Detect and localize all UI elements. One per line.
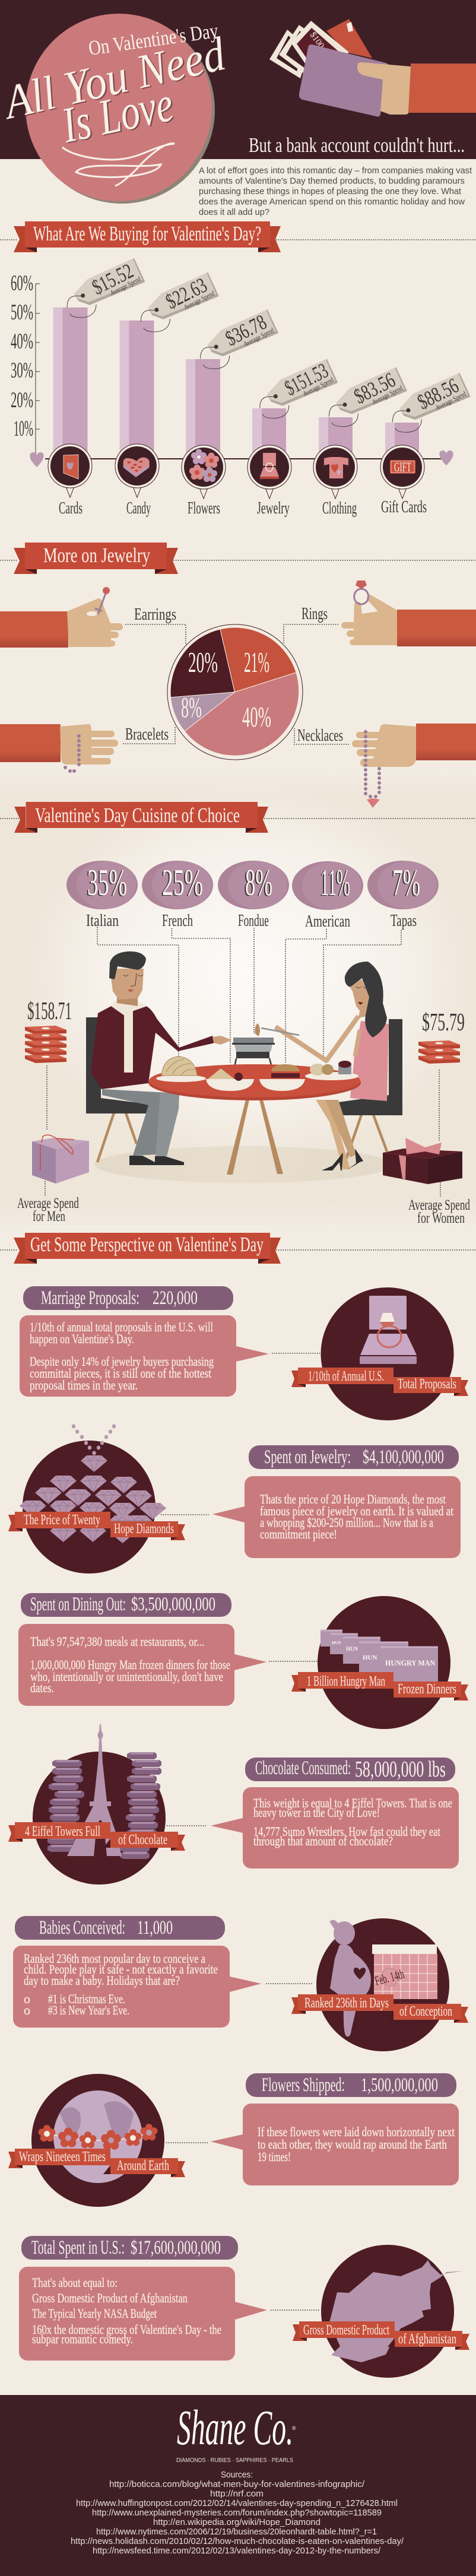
- calendar: Feb. 14th: [373, 1966, 406, 1988]
- heading banner: cuisine of choice: [14, 802, 268, 833]
- ribbon caption: Around Earth: [117, 2158, 169, 2174]
- slice: necklaces 40%: [185, 672, 299, 756]
- dress: [350, 1021, 389, 1101]
- cuisine bubble: tapas 7%: 7%: [392, 861, 420, 903]
- y axis: 10%: [14, 417, 33, 441]
- arm with fondue fork: [255, 1016, 360, 1061]
- bar: candy: [120, 321, 154, 459]
- cuisine bubble: italian 35%: [66, 861, 138, 909]
- slice: earrings 20%: [170, 629, 234, 697]
- stat pill: 220,000: [153, 1287, 198, 1309]
- stat pill: $3,500,000,000: [131, 1594, 215, 1615]
- panel: total spent in us: [19, 2236, 469, 2378]
- price tag: clothing: $83.56: [350, 368, 399, 408]
- chocolate stack right: [120, 1752, 161, 1859]
- cuisine bubble: french 25%: 25%: [162, 861, 203, 903]
- caption: Average Spend: [17, 1195, 79, 1211]
- gift box purple: [32, 1135, 89, 1184]
- ribbon caption: [8, 2149, 185, 2177]
- sources list: Sources:: [221, 2470, 253, 2480]
- dining table with food and fondue pot: [148, 1038, 361, 1100]
- price tag: candy: Average Spend: [182, 289, 216, 312]
- illustration: frozen dinners in oval: HUN: [346, 1646, 358, 1652]
- men's average spend: [17, 998, 89, 1224]
- cuisine bubble: fondue 8%: [218, 861, 289, 909]
- stat pill: Flowers Shipped:: [262, 2074, 345, 2096]
- stat pill: Spent on Dining Out:: [30, 1594, 126, 1615]
- fondue pot: [232, 1038, 275, 1077]
- logo: shane co: DIAMONDS · RUBIES · SAPPHIRES · PEARLS: [176, 2457, 293, 2464]
- stat pill: [23, 1286, 233, 1310]
- illustration: hand holding wallet with cash and card: [269, 19, 476, 116]
- price tag: clothing: Average Spend: [370, 383, 404, 406]
- ribbon caption: [291, 1994, 468, 2023]
- connector lines: cuisines to dishes: [97, 927, 401, 1062]
- title: is love: Is Love: [57, 76, 178, 154]
- panel: marriage proposals: [20, 1286, 468, 1420]
- connector lines: jewelry labels: [123, 624, 349, 744]
- text callout: o: [24, 2003, 30, 2017]
- icon medallion: gift cards: GIFT: [394, 459, 411, 474]
- text callout: 160x the domestic gross of Valentine's Day - the: [32, 2322, 221, 2337]
- price tag: jewelry: Average Spend: [302, 375, 335, 398]
- category labels: [59, 498, 427, 518]
- dish: sandwich and berries: [206, 1068, 254, 1091]
- value: $158.71: [27, 998, 72, 1025]
- cuisine labels: Tapas: [391, 912, 417, 930]
- stat pill: [249, 1445, 459, 1469]
- pie values: [181, 646, 271, 733]
- stat pill: [21, 2236, 238, 2260]
- price tag: cards: [67, 258, 145, 318]
- cuisine bubble: american 11%: 11%: [320, 861, 350, 903]
- caption: for Men: [33, 1208, 65, 1224]
- category labels: Flowers: [188, 499, 220, 518]
- text callout: #3 is New Year's Eve.: [48, 2003, 129, 2017]
- cuisine bubble: fondue 8%: 8%: [245, 861, 272, 903]
- text callout: who, intentionally or unintentionally, don't have: [30, 1669, 223, 1684]
- illustration: frozen dinners in oval: HUN: [363, 1654, 377, 1661]
- illustration: hope diamonds in oval: [20, 1425, 166, 1573]
- text callout: That's about equal to:: [32, 2275, 118, 2290]
- table top: [148, 1065, 361, 1100]
- header band: [0, 0, 476, 159]
- intro paragraph: purchasing these things in hopes of pleasing the one they love. What: [199, 187, 461, 196]
- intro paragraph: does it all add up?: [199, 208, 269, 217]
- stat pill: Spent on Jewelry:: [264, 1446, 351, 1468]
- ribbon caption: Hope Diamonds: [114, 1521, 174, 1537]
- ribbon caption: of Chocolate: [118, 1832, 167, 1848]
- text callout: [211, 1787, 459, 1868]
- icon medallion: jewelry: [247, 445, 291, 499]
- text callout: dates.: [30, 1680, 54, 1695]
- category labels: Jewelry: [257, 499, 290, 518]
- text callout: subpar romantic comedy.: [32, 2331, 133, 2346]
- hand holding ring: [341, 580, 476, 646]
- y axis: 50%: [11, 300, 33, 325]
- credit card: [326, 19, 372, 58]
- y axis: 20%: [11, 388, 33, 413]
- ribbon caption: [8, 1512, 185, 1540]
- bar: cards: [53, 307, 88, 459]
- calendar: [372, 1944, 437, 1999]
- text callout: heavy tower in the City of Love!: [253, 1805, 380, 1820]
- caption: [17, 1195, 79, 1224]
- label: bracelets: Bracelets: [125, 725, 169, 744]
- text callout: Despite only 14% of jewelry buyers purchasing: [30, 1354, 214, 1369]
- women's average spend: [383, 1009, 470, 1226]
- gift box dark: [383, 1138, 462, 1184]
- title: all you need: All You Need: [0, 28, 230, 130]
- text callout: [20, 1315, 269, 1397]
- illustration: ring box in oval: [320, 1287, 453, 1420]
- intro paragraph: amounts of Valentine's Day themed products, to budding paramours: [199, 177, 465, 186]
- illustration: expecting mother and calendar: [316, 1918, 449, 2051]
- price tag: jewelry: [260, 359, 338, 418]
- bar: clothing: [319, 417, 353, 459]
- dish: pasta: [156, 1057, 206, 1082]
- floor shadow under table: [94, 1146, 392, 1183]
- man on chair: [86, 951, 232, 1165]
- text callout: 1,000,000,000 Hungry Man frozen dinners for those: [30, 1657, 230, 1672]
- stat pill: 1,500,000,000: [361, 2074, 438, 2096]
- sources list: http://news.holidash.com/2010/02/12/how-much-chocolate-is-eaten-on-valentines-day/: [71, 2536, 404, 2546]
- price tag: flowers: $36.78: [221, 310, 270, 350]
- ribbon caption: Wraps Nineteen Times: [19, 2149, 106, 2165]
- cuisine labels: American: [305, 912, 350, 931]
- title: on valentine's day: On Valentine's Day: [87, 19, 220, 60]
- cuisine labels: Fondue: [238, 912, 269, 930]
- intro paragraph: does the average American spend on this romantic holiday and how: [199, 197, 465, 207]
- wallet: [299, 45, 389, 116]
- woman on chair: [255, 962, 402, 1170]
- panel: spent on jewelry: [8, 1425, 461, 1573]
- icon medallion: cards: [48, 444, 92, 497]
- stat pill: [246, 2073, 456, 2097]
- price tag: gift cards: $88.56: [414, 373, 462, 414]
- text callout: [212, 1476, 461, 1558]
- textured backdrop: cuisine section: [0, 772, 476, 1229]
- illustration: eiffel tower and chocolate stacks: [33, 1724, 166, 1885]
- icon medallion: clothing: [313, 445, 357, 499]
- sources list: http://newsfeed.time.com/2012/02/13/valentines-day-2012-by-the-numbers/: [93, 2546, 381, 2556]
- ribbon caption: Ranked 236th in Days: [304, 1996, 389, 2011]
- text callout: The Typical Yearly NASA Budget: [32, 2306, 157, 2321]
- ribbon caption: 1 Billion Hungry Man: [307, 1674, 385, 1689]
- text callout: child. People play it safe - not exactly a favorite: [24, 1962, 218, 1977]
- cuisine bubble: american 11%: [292, 861, 363, 910]
- stat pill: Babies Conceived:: [39, 1917, 125, 1939]
- panel: flowers shipped: [8, 2073, 459, 2207]
- stat pill: 11,000: [137, 1917, 173, 1939]
- face: [110, 969, 144, 1006]
- text callout: through that amount of chocolate?: [253, 1833, 393, 1848]
- ribbon caption: [8, 1822, 185, 1851]
- text callout: happen on Valentine's Day.: [30, 1331, 134, 1346]
- face: [350, 979, 369, 1018]
- cash stack: [418, 1040, 460, 1064]
- cuisine bubble: french 25%: [142, 861, 213, 909]
- y axis: 60%: [11, 271, 33, 296]
- dish: dumplings and dessert: [305, 1061, 358, 1080]
- illustration: frozen dinners in oval: HUN: [332, 1641, 341, 1645]
- heading banner: more on jewelry: [14, 543, 178, 574]
- pie values: 21%: [244, 646, 269, 678]
- hand: [212, 1036, 232, 1045]
- pie values: 40%: [242, 700, 271, 733]
- bar: gift cards: [385, 423, 419, 459]
- stat pill: Total Spent in U.S.:: [31, 2237, 125, 2258]
- sources list: http://en.wikipedia.org/wiki/Hope_Diamond: [153, 2517, 320, 2527]
- arm sleeve: [408, 64, 476, 113]
- hand holding earring: [0, 587, 123, 648]
- price tag: jewelry: $151.53: [281, 359, 332, 400]
- category labels: Cards: [59, 499, 82, 518]
- stat pill: Chocolate Consumed:: [255, 1757, 351, 1779]
- ribbon caption: [293, 2321, 469, 2350]
- label: rings: Rings: [302, 605, 328, 623]
- sources list: http://www.unexplained-mysteries.com/forum/index.php?showtopic=118589: [92, 2508, 382, 2518]
- heading banner: what are we buying: What Are We Buying for Valentine's Day?: [33, 222, 261, 245]
- price tag: candy: $22.63: [162, 273, 211, 313]
- collar and scarf: [111, 999, 147, 1073]
- text callout: [19, 2267, 267, 2361]
- price tag: cards: Average Spend: [109, 275, 142, 297]
- title flourish: [62, 144, 174, 186]
- bar: jewelry: [252, 408, 286, 459]
- text callout: proposal times in the year.: [30, 1378, 138, 1392]
- hand with bracelet: [0, 724, 118, 773]
- ribbon caption: 4 Eiffel Towers Full: [25, 1824, 100, 1839]
- panel: chocolate consumed: [8, 1724, 459, 1885]
- logo: shane co: Shane Co.: [177, 2400, 293, 2456]
- eiffel tower: [67, 1724, 122, 1856]
- ribbon caption: Gross Domestic Product: [303, 2323, 389, 2338]
- intro paragraph: [199, 166, 472, 217]
- illustration: map of afghanistan: [321, 2245, 463, 2378]
- hair: [109, 951, 146, 979]
- text callout: 1/10th of annual total proposals in the U.S. will: [30, 1319, 213, 1334]
- bank notes: [269, 21, 349, 78]
- stat pill: $17,600,000,000: [131, 2237, 221, 2258]
- y axis: 40%: [11, 329, 33, 354]
- legs and heels: [316, 1100, 363, 1170]
- cuisine bubble: italian 35%: 35%: [87, 861, 127, 903]
- text callout: Gross Domestic Product of Afghanistan: [32, 2291, 188, 2305]
- pie values: 20%: [188, 646, 218, 678]
- text callout: committal pieces, it is still one of the hottest: [30, 1366, 211, 1381]
- logo: shane co: ®: [292, 2425, 296, 2431]
- bar chart: share buying each gift: [11, 271, 453, 467]
- heading banner: get some perspective: Get Some Perspective on Valentine's Day: [30, 1233, 264, 1256]
- ribbon caption: [291, 1672, 468, 1701]
- hair: [345, 962, 387, 1038]
- ribbon caption: 1/10th of Annual U.S.: [308, 1369, 384, 1384]
- icon medallion: flowers: [182, 445, 226, 499]
- intro paragraph: A lot of effort goes into this romantic day – from companies making vast: [199, 166, 472, 176]
- slice: rings 21%: [220, 627, 296, 692]
- price tag: flowers: [201, 309, 278, 369]
- table legs: [227, 1100, 283, 1175]
- bank notes: $100: [308, 30, 326, 50]
- text callout: day to make a baby. Holidays that are?: [24, 1973, 180, 1988]
- text callout: #1 is Christmas Eve.: [48, 1991, 125, 2006]
- icon medallion: gift cards: [380, 445, 424, 499]
- category labels: Gift Cards: [381, 498, 427, 516]
- heading banner: what are we buying: [14, 221, 281, 252]
- text callout: [211, 2104, 459, 2185]
- sources list: http://www.nytimes.com/2006/12/19/business/20leonhardt-table.html?_r=1: [96, 2527, 377, 2537]
- illustration: globe wrapped with flowers: [31, 2074, 164, 2207]
- text callout: That's 97,547,380 meals at restaurants, or...: [30, 1634, 204, 1649]
- cuisine labels: French: [162, 912, 193, 930]
- pie chart: jewelry share: [167, 624, 303, 760]
- text callout: o: [24, 1991, 30, 2006]
- cuisine labels: [86, 912, 417, 931]
- price tag: clothing: [329, 367, 407, 427]
- footer band: [0, 2395, 476, 2576]
- stat pill: Marriage Proposals:: [41, 1287, 139, 1309]
- sources list: [71, 2470, 404, 2556]
- caption: [408, 1197, 470, 1226]
- logo: shane co: [176, 2400, 296, 2464]
- stat pill: [15, 1916, 225, 1940]
- heart marker right: [439, 451, 453, 465]
- illustration: frozen dinners in oval: HUNGRY MAN: [385, 1658, 436, 1667]
- legs and shoes: [102, 1089, 184, 1165]
- price tag: gift cards: Average Spend: [434, 389, 468, 412]
- slice: bracelets 8%: [171, 692, 234, 731]
- cash stack: [25, 1026, 66, 1063]
- y axis: [11, 271, 40, 460]
- text callout: commitment piece!: [260, 1527, 337, 1541]
- hand: [357, 62, 411, 115]
- category labels: Clothing: [322, 499, 357, 518]
- text callout: Ranked 236th most popular day to conceive a: [24, 1951, 205, 1966]
- heart marker left: [30, 452, 44, 467]
- price tag: flowers: Average Spend: [242, 326, 275, 348]
- pregnant figure: [329, 1920, 371, 2036]
- text callout: [18, 1624, 266, 1706]
- price tag: candy: [141, 272, 219, 332]
- bar: flowers: [186, 359, 220, 459]
- sources list: http://www.huffingtonpost.com/2012/02/14/valentines-day-spending_n_1276428.html: [76, 2498, 398, 2508]
- price tag: cards: $15.52: [88, 259, 137, 299]
- panel: spent on dining out: [18, 1593, 468, 1729]
- label: necklaces: Necklaces: [297, 727, 343, 745]
- heading banner: more on jewelry: More on Jewelry: [43, 544, 150, 567]
- heading banner: cuisine of choice: Valentine's Day Cuisine of Choice: [35, 804, 240, 827]
- icon medallion: candy: [115, 444, 159, 497]
- text callout: 19 times!: [258, 2149, 291, 2164]
- panel: babies conceived: [13, 1916, 468, 2051]
- sources list: http://nrf.com: [210, 2489, 264, 2499]
- dish: burger: [259, 1064, 305, 1091]
- title oval with lettering: [0, 14, 230, 204]
- label: earrings: Earrings: [134, 605, 176, 624]
- jacket: [91, 1004, 215, 1089]
- ribbon caption: [291, 1368, 468, 1396]
- cuisine bubble: tapas 7%: [367, 861, 439, 909]
- heading banner: get some perspective: [14, 1233, 281, 1264]
- hand with necklace: [352, 724, 476, 808]
- chocolate stack left: [47, 1760, 84, 1852]
- illustration: frozen dinners in oval: [318, 1596, 450, 1729]
- ribbon caption: The Price of Twenty: [24, 1512, 100, 1528]
- chair: [338, 1019, 402, 1165]
- chair: [86, 1017, 148, 1162]
- heart on belly: [354, 1968, 366, 1979]
- price tag: gift cards: [392, 373, 471, 432]
- text callout: [13, 1946, 261, 2028]
- pie values: 8%: [181, 691, 202, 724]
- category labels: Candy: [126, 499, 151, 518]
- sources list: http://boticca.com/blog/what-men-buy-for-valentines-infographic/: [109, 2479, 365, 2489]
- y axis: 30%: [11, 359, 33, 383]
- cuisine labels: Italian: [86, 912, 119, 930]
